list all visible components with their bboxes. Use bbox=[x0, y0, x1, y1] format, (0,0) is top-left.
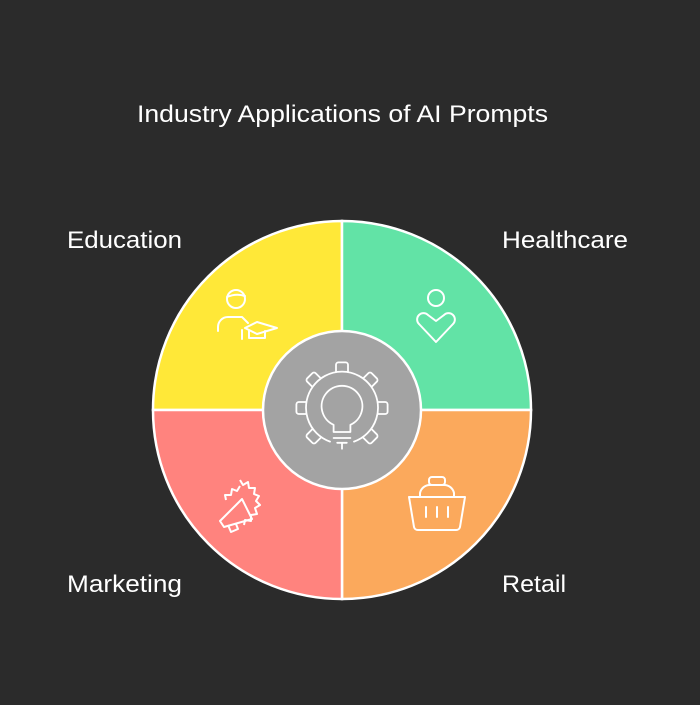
label: Retail: Retail bbox=[502, 571, 566, 598]
icon: marketing bbox=[220, 480, 260, 532]
segment: Retail bbox=[342, 410, 531, 599]
icon: healthcare bbox=[417, 290, 455, 342]
center circle bbox=[263, 331, 421, 489]
segment: Education bbox=[153, 221, 342, 410]
icon: retail bbox=[409, 477, 465, 530]
label: Education: Education bbox=[67, 227, 182, 254]
title: Industry Applications of AI Prompts bbox=[137, 101, 548, 128]
pie chart bbox=[153, 221, 531, 599]
label: Marketing: Marketing bbox=[67, 571, 182, 598]
segment: Healthcare bbox=[342, 221, 531, 410]
label: Healthcare: Healthcare bbox=[502, 227, 628, 254]
segment: Marketing bbox=[153, 410, 342, 599]
icon: education bbox=[218, 290, 277, 339]
icon: gear bulb bbox=[296, 362, 388, 449]
